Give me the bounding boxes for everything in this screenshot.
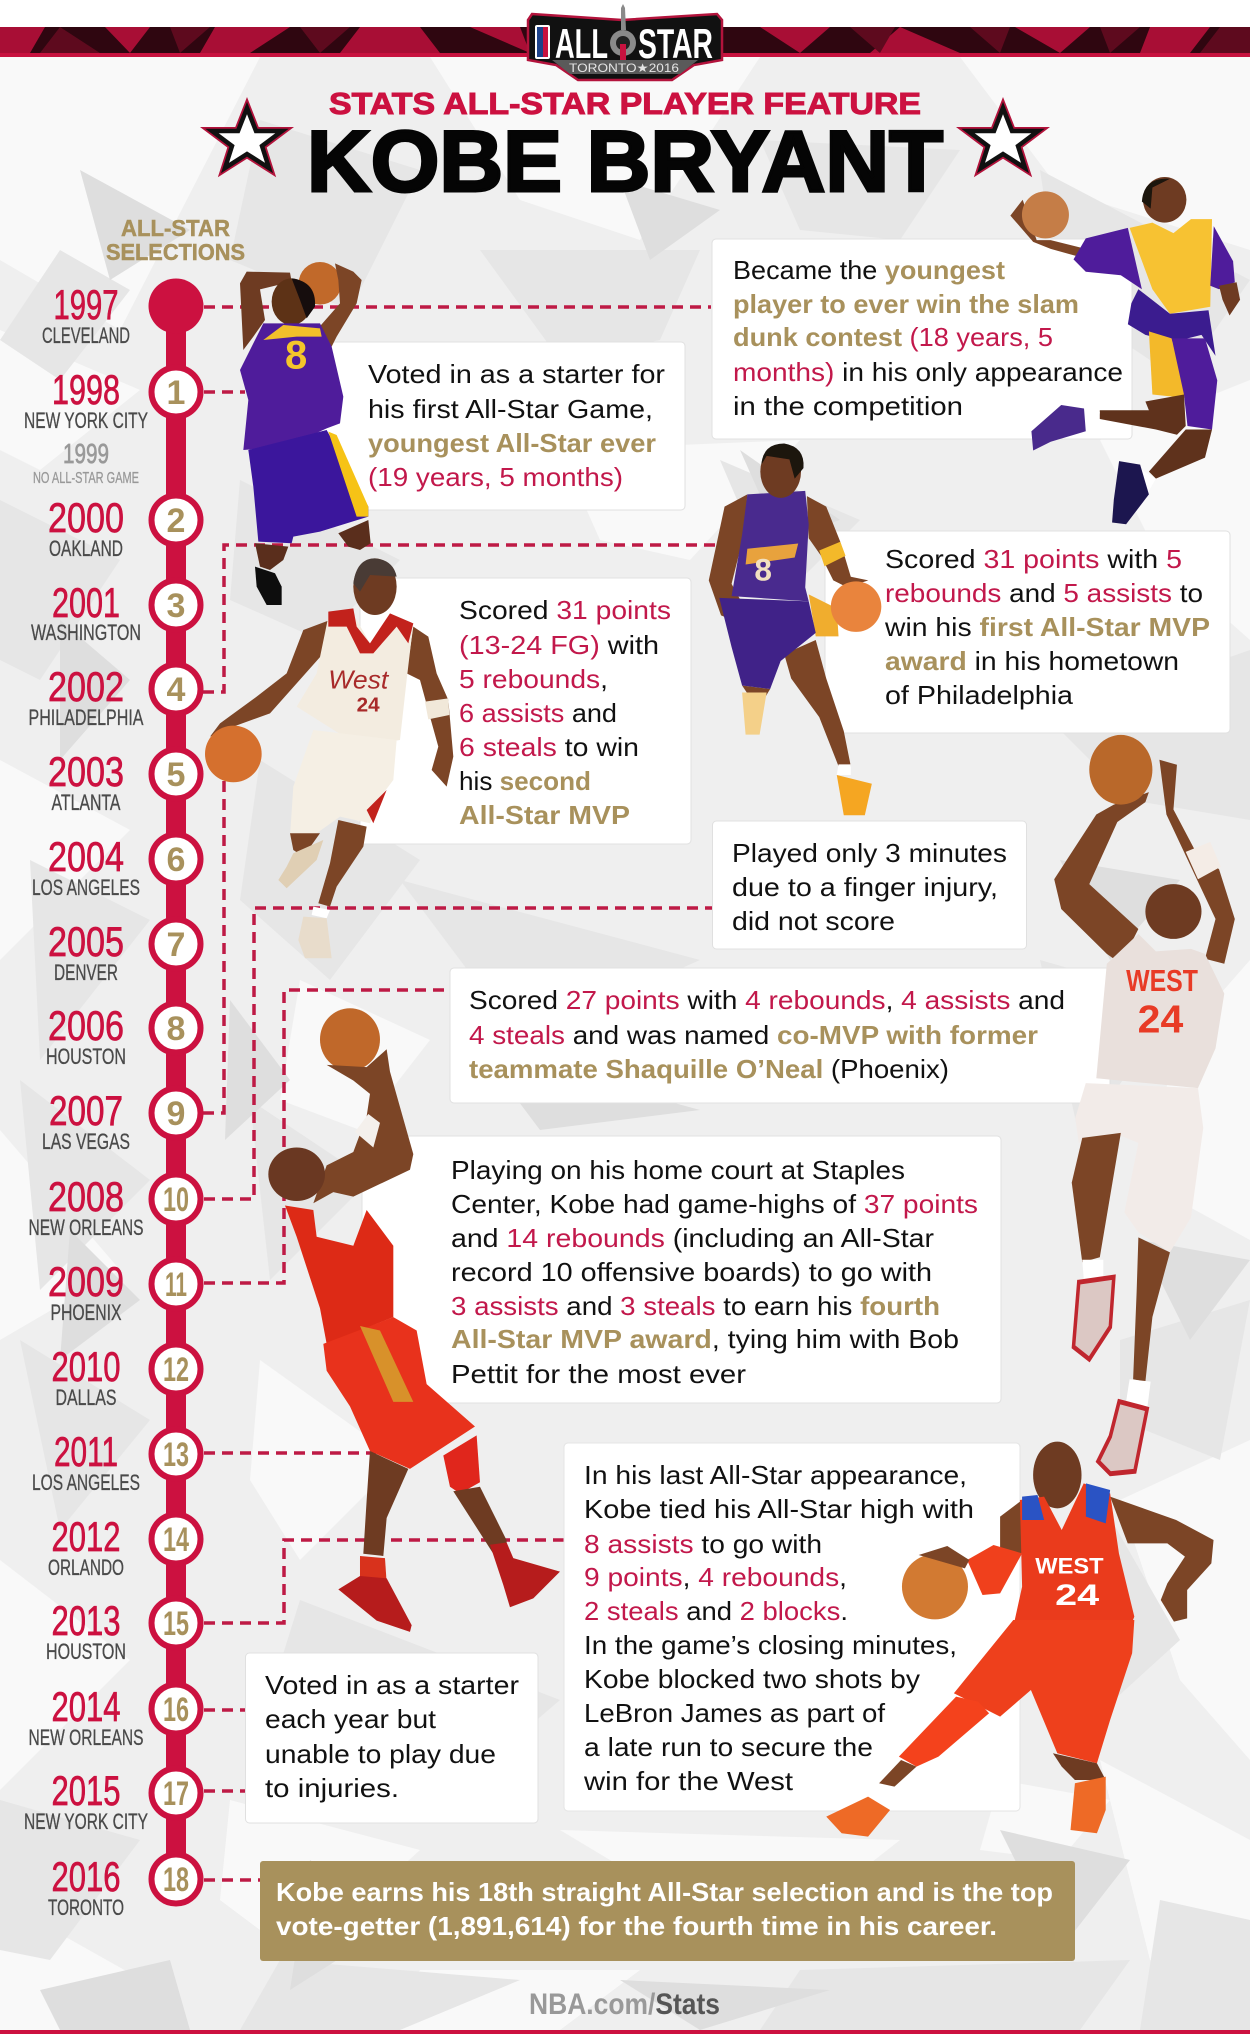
panel: 2008 finger injury [712,821,1026,949]
panel: 2002 first MVP: Scored 31 points with 5 [885,544,1182,574]
years and host cities: NEW YORK CITY [24,408,148,433]
panel: 2011 fourth MVP: and 14 rebounds (including an All-Star [451,1223,934,1253]
panel: 2013 last All-Star appearance: 8 assists to go with [584,1529,822,1559]
subtitle: STATS ALL-STAR PLAYER FEATURE [329,86,921,121]
player: 1998 purple dunk [240,262,371,605]
panel: 2013 last All-Star appearance [564,1443,1020,1811]
selection numbers: 1 [167,374,185,412]
player: 2002 purple dribble [709,444,881,815]
panel: 2009 co-MVP [450,968,1110,1103]
panel: 2013 last All-Star appearance: 2 steals and 2 blocks. [584,1596,848,1626]
panel: 2008 finger injury: Played only 3 minutes [732,838,1007,868]
selection numbers: 12 [163,1351,189,1389]
years and host cities: ATLANTA [52,790,121,815]
years and host cities: OAKLAND [49,536,123,561]
logo: NBA All-Star Toronto 2016: TORONTO★2016 [569,61,679,75]
panel: 2011 fourth MVP: record 10 offensive boards) to go with [451,1257,932,1287]
panel: 2007 second MVP: (13-24 FG) with [459,630,659,660]
timeline heading: All-Star selections: ALL-STAR [121,215,230,241]
footer bar [0,2030,1250,2034]
player: 2009 white West shot [1054,735,1235,1474]
timeline heading: All-Star selections [106,215,245,265]
selection numbers: 14 [163,1521,189,1559]
panel: 2011 fourth MVP: Center, Kobe had game-highs of 37 points [451,1189,978,1219]
years and host cities: PHOENIX [50,1300,122,1325]
panel: 2007 second MVP: Scored 31 points [459,595,671,625]
selection numbers: 3 [167,587,185,625]
selection numbers: 13 [163,1436,189,1474]
years and host cities: 1999 [63,438,109,469]
panel: 2013 last All-Star appearance: 9 points , 4 rebounds , [584,1562,847,1592]
selection numbers: 16 [163,1691,189,1729]
selection numbers: 5 [167,756,185,794]
panel: 2009 co-MVP: 4 steals and was named co-MVP with former [469,1020,1038,1050]
years and host cities: 2000 [48,494,124,541]
selection numbers: 4 [167,671,186,709]
years and host cities: ORLANDO [48,1555,124,1580]
years and host cities: 2015 [52,1767,120,1814]
footer source: NBA.com/Stats [529,1988,720,2021]
years and host cities: TORONTO [48,1895,124,1920]
selection numbers: 8 [167,1010,185,1048]
icon: right star [968,108,1038,168]
panel: 2014-2015 injuries: to injuries. [265,1773,399,1803]
player: 1998 purple dunk: 8 [285,333,307,377]
selection numbers: 18 [163,1861,189,1899]
panel: 2011 fourth MVP: All-Star MVP award , tying him with Bob [451,1324,959,1354]
years and host cities [24,281,148,1920]
logo: NBA All-Star Toronto 2016: ALL [555,20,608,67]
years and host cities: 2007 [49,1087,123,1134]
panel: 2007 second MVP: 5 rebounds , [459,664,608,694]
years and host cities: 2005 [48,918,124,965]
panel: 2013 last All-Star appearance: LeBron James as part of [584,1698,886,1728]
years and host cities: LOS ANGELES [32,1470,140,1495]
logo: NBA All-Star Toronto 2016: STAR [638,20,713,67]
years and host cities: LAS VEGAS [42,1129,130,1154]
panel: 2014-2015 injuries: each year but [265,1704,437,1734]
panel: 1997 slam dunk contest: months) in his only appearance [733,357,1123,387]
years and host cities: PHILADELPHIA [28,705,144,730]
years and host cities: NEW YORK CITY [24,1809,148,1834]
years and host cities: 2013 [52,1597,120,1644]
player: 1997 slam dunk contest [1010,177,1240,524]
panel: 2002 first MVP: award in his hometown [885,646,1179,676]
icon: left star [212,108,282,168]
panel: 1998 first All-Star Game: Voted in as a starter for [368,359,665,389]
years and host cities: 2004 [48,833,124,880]
years and host cities: 2012 [52,1513,120,1560]
panel: 2011 fourth MVP: Playing on his home court at Staples [451,1155,905,1185]
panel: 2014-2015 injuries: unable to play due [265,1739,496,1769]
years and host cities: CLEVELAND [42,323,130,348]
callout: 2016 selection: Kobe earns his 18th straight All-Star selection and is the top [276,1877,1053,1907]
panel: 2014-2015 injuries [246,1653,538,1823]
player: 2013 red West dribble [826,1442,1214,1837]
title: KOBE BRYANT [307,114,943,210]
player: 2013 red West dribble: 24 [1055,1579,1100,1612]
panel: 2014-2015 injuries: Voted in as a starter [265,1670,519,1700]
panel: 1998 first All-Star Game: his first All-Star Game, [368,394,653,424]
years and host cities: 1997 [54,281,118,328]
panel: 2002 first MVP: rebounds and 5 assists to [885,578,1203,608]
player: 2002 purple dribble: 8 [754,551,772,587]
panel: 2007 second MVP [360,578,691,844]
years and host cities: 2010 [52,1343,120,1390]
panel: 2008 finger injury: due to a finger injury, [732,872,998,902]
selection numbers: 11 [165,1266,187,1304]
panel: 1997 slam dunk contest [712,239,1132,439]
selection numbers: 17 [163,1775,189,1813]
panel: 2011 fourth MVP: Pettit for the most ever [451,1359,746,1389]
selection numbers: 6 [167,841,185,879]
selection markers [152,368,200,1904]
panel: 2013 last All-Star appearance: Kobe tied his All-Star high with [584,1494,974,1524]
years and host cities: 2011 [54,1428,118,1475]
panel: 2013 last All-Star appearance: win for the West [583,1766,794,1796]
selection numbers: 15 [163,1605,189,1643]
years and host cities: NEW ORLEANS [28,1725,144,1750]
player: 2007 white West dribble: 24 [357,694,380,717]
years and host cities: 2003 [48,748,124,795]
selection numbers: 9 [167,1095,185,1133]
panel: 2002 first MVP [825,531,1230,733]
panel: 2013 last All-Star appearance: Kobe blocked two shots by [584,1664,920,1694]
years and host cities: LOS ANGELES [32,875,140,900]
player: 2013 red West dribble: WEST [1035,1555,1104,1578]
panel: 2011 fourth MVP [362,1136,1001,1403]
panel: 1998 first All-Star Game: (19 years, 5 months) [368,462,623,492]
player: 2011 red shot [268,1008,560,1632]
years and host cities: HOUSTON [46,1044,126,1069]
panel: 1997 slam dunk contest: dunk contest (18 years, 5 [733,322,1053,352]
panel: 2002 first MVP: of Philadelphia [885,680,1074,710]
selection numbers: 7 [167,926,185,964]
years and host cities: 2002 [48,663,124,710]
player: 2007 white West dribble: West [328,664,390,694]
panel: 1998 first All-Star Game [300,342,685,510]
years and host cities: DALLAS [56,1385,116,1410]
panel: 1997 slam dunk contest: player to ever win the slam [733,289,1079,319]
years and host cities: DENVER [54,960,118,985]
panel: 2009 co-MVP: teammate Shaquille O’Neal (Phoenix) [469,1054,949,1084]
connector lines [203,307,735,1880]
panel: 1997 slam dunk contest: Became the youngest [733,255,1005,285]
years and host cities: 1998 [52,366,120,413]
panel: 2007 second MVP: 6 assists and [459,698,617,728]
years and host cities: NO ALL-STAR GAME [33,470,139,487]
panel: 2007 second MVP: his second [459,766,591,796]
panel: 2013 last All-Star appearance: In his last All-Star appearance, [584,1460,967,1490]
years and host cities: 2009 [48,1258,124,1305]
panel: 2013 last All-Star appearance: In the game’s closing minutes, [584,1630,957,1660]
years and host cities: HOUSTON [46,1639,126,1664]
header band [0,0,1250,57]
timeline heading: All-Star selections: SELECTIONS [106,239,245,265]
panel: 2007 second MVP: 6 steals to win [459,732,639,762]
player: 2009 white West shot: WEST [1126,963,1198,998]
logo: NBA All-Star Toronto 2016 [528,4,722,80]
panel: 2002 first MVP: win his first All-Star MVP [884,612,1210,642]
years and host cities: 2014 [52,1683,120,1730]
years and host cities: NEW ORLEANS [28,1215,144,1240]
selection numbers [163,374,189,1899]
panel: 2013 last All-Star appearance: a late run to secure the [584,1732,873,1762]
years and host cities: 2001 [52,579,120,626]
selection numbers: 10 [163,1181,189,1219]
selection numbers: 2 [167,502,185,540]
panel: 1998 first All-Star Game: youngest All-Star ever [368,428,656,458]
panel: 2007 second MVP: All-Star MVP [459,800,630,830]
panel: 2008 finger injury: did not score [732,906,895,936]
years and host cities: WASHINGTON [31,620,141,645]
panel: 1997 slam dunk contest: in the competition [733,391,963,421]
panel: 2009 co-MVP: Scored 27 points with 4 rebounds , 4 assists and [469,985,1065,1015]
panel: 2011 fourth MVP: 3 assists and 3 steals to earn his fourth [451,1291,940,1321]
years and host cities: 2008 [48,1173,124,1220]
callout: 2016 selection: vote-getter (1,891,614) for the fourth time in his career. [276,1911,997,1941]
years and host cities: 2016 [52,1853,120,1900]
player: 2009 white West shot: 24 [1138,999,1184,1042]
timeline axis [148,278,204,1904]
player: 2007 white West dribble [205,558,453,958]
years and host cities: 2006 [48,1002,124,1049]
callout: 2016 selection [260,1861,1075,1961]
